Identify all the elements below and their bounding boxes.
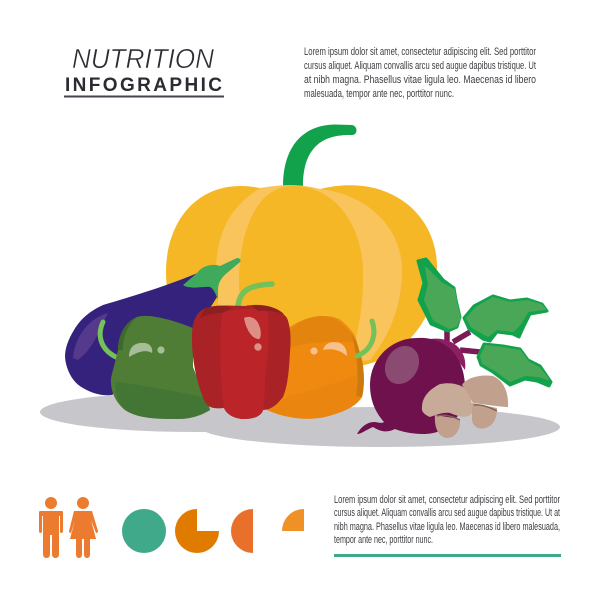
divider: green line	[334, 554, 561, 557]
title: INFOGRAPHIC	[65, 75, 222, 96]
beet leaves	[418, 259, 551, 386]
beet	[357, 338, 465, 434]
green pepper	[100, 316, 210, 419]
icon: man	[39, 497, 63, 558]
text block: bottom: tempor ante nec, porttitor nunc.	[334, 534, 433, 546]
title: NUTRITION	[72, 43, 215, 74]
title	[64, 43, 224, 98]
chart: half circle	[231, 509, 253, 553]
pumpkin	[166, 124, 437, 372]
shadow under vegetables	[40, 392, 560, 447]
chart: quarter circle	[282, 509, 304, 531]
text block: top intro: malesuada, tempor ante nec, porttitor nunc.	[304, 88, 454, 100]
chart: three-quarter pie	[175, 509, 219, 553]
text block: bottom	[334, 494, 560, 546]
eggplant	[65, 258, 241, 395]
text block: top intro: at nibh magna. Phasellus vitae ligula leo. Maecenas id libero	[304, 74, 536, 86]
icon: woman	[69, 497, 98, 558]
mushrooms	[422, 375, 508, 438]
chart: full circle	[122, 509, 166, 553]
red pepper	[192, 284, 291, 419]
orange pepper	[267, 316, 374, 419]
text block: top intro	[304, 46, 536, 100]
